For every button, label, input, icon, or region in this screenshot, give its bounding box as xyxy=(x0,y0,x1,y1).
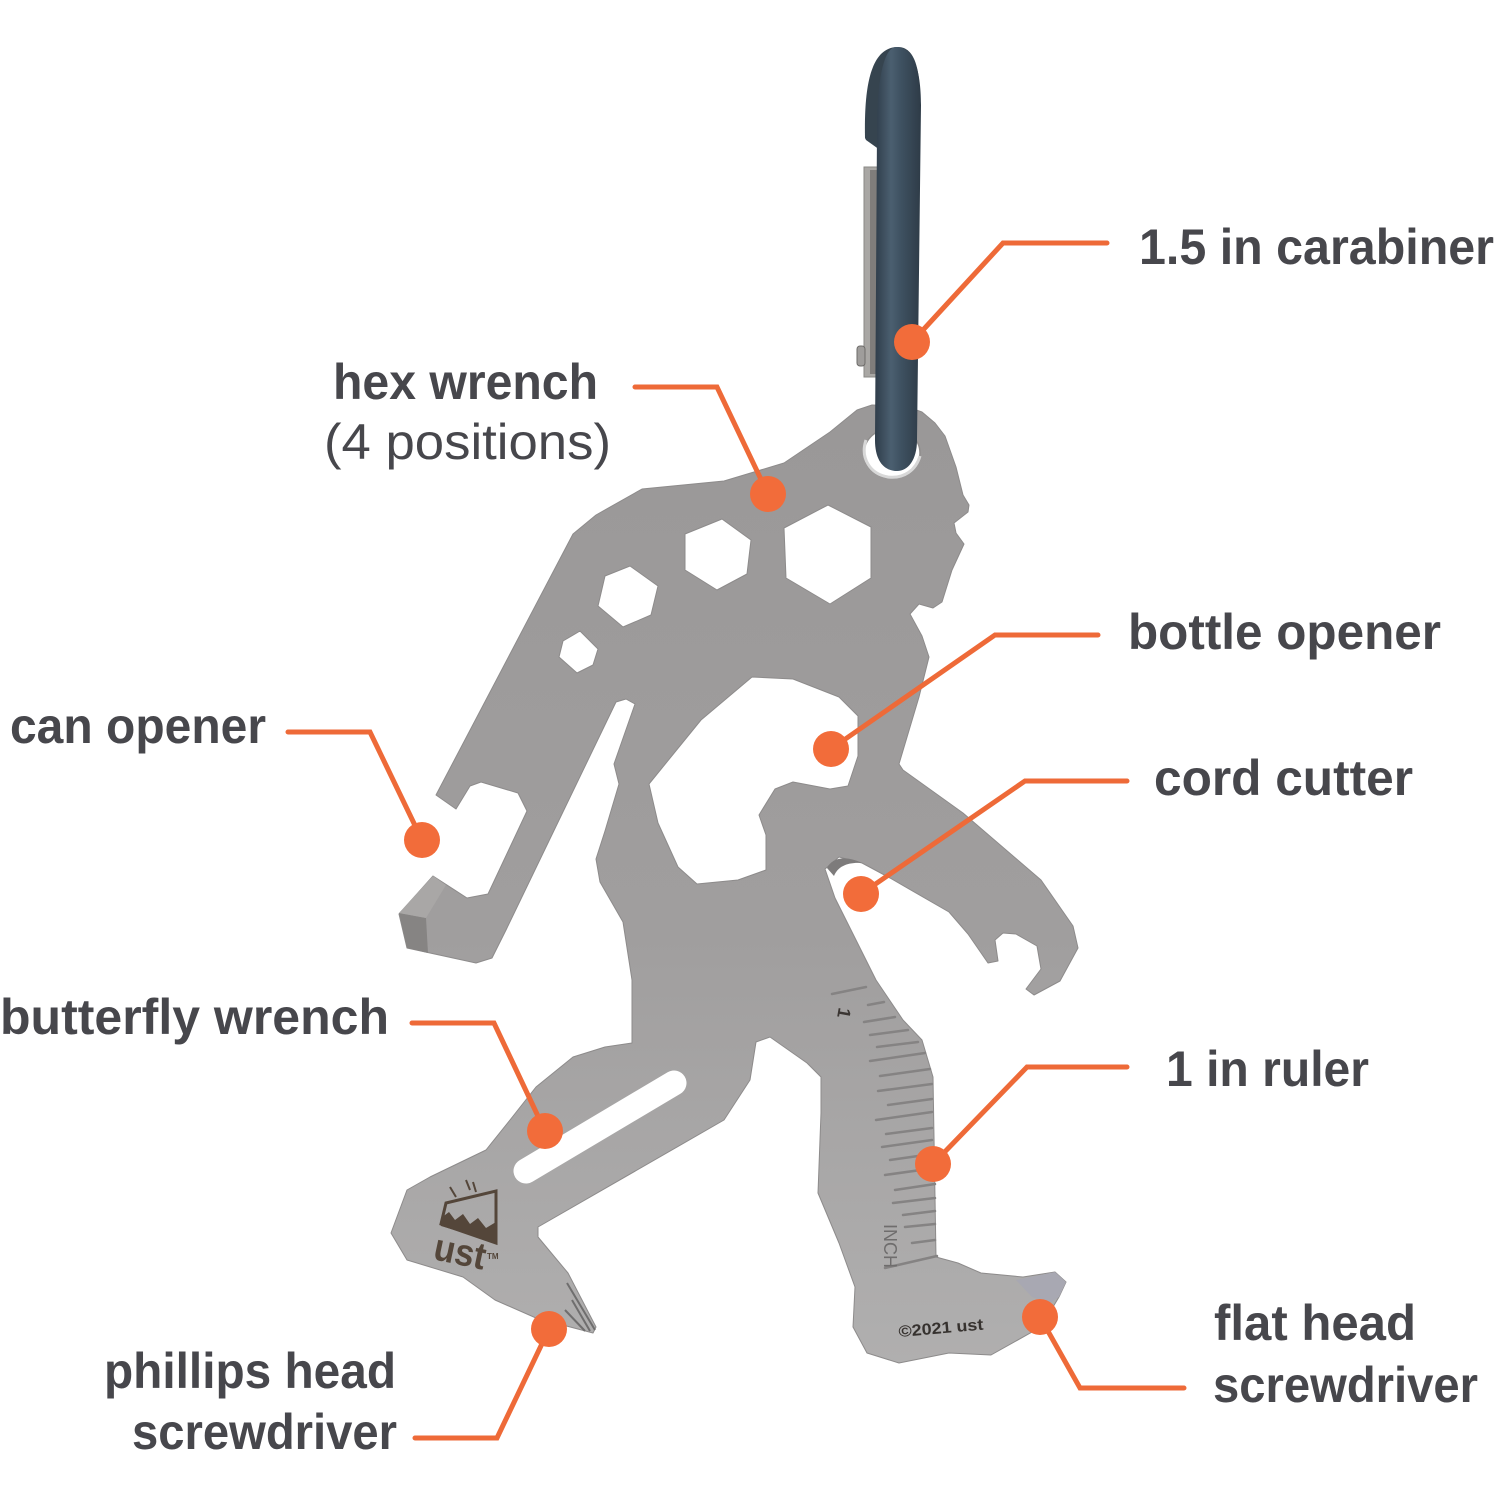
phillips tip xyxy=(565,1283,595,1331)
lanyard hole xyxy=(864,428,920,478)
ruler label INCH: INCH xyxy=(880,1224,900,1268)
callout: ruler: 1 in ruler xyxy=(1166,1041,1369,1097)
callout: phillips head screwdriver xyxy=(104,1311,567,1460)
ust logo engraving xyxy=(430,1180,499,1279)
callout: hex wrench: hex wrench xyxy=(333,354,598,410)
callout: cord cutter: cord cutter xyxy=(1154,750,1413,806)
callout: can opener: can opener xyxy=(10,698,266,754)
gate pin xyxy=(857,346,865,366)
ruler number 1: 1 xyxy=(833,1006,855,1020)
can opener side face xyxy=(399,913,428,953)
cord cutter inner bevel xyxy=(827,858,862,876)
callout: cord cutter xyxy=(843,750,1413,912)
callout: butterfly wrench xyxy=(0,989,563,1149)
can opener top facet xyxy=(399,876,446,918)
butterfly wrench slot xyxy=(526,1083,674,1171)
carabiner hook xyxy=(865,47,920,150)
callout: ruler xyxy=(915,1041,1369,1182)
callout: flat head screwdriver: screwdriver xyxy=(1213,1357,1478,1413)
callout: phillips head screwdriver: phillips head xyxy=(104,1343,396,1399)
callout: flat head screwdriver xyxy=(1022,1295,1478,1413)
callout: bottle opener: bottle opener xyxy=(1128,604,1441,660)
callout: carabiner: 1.5 in carabiner xyxy=(1139,219,1494,275)
copyright engraving: ©2021 ust xyxy=(898,1317,985,1341)
callout: butterfly wrench: butterfly wrench xyxy=(0,989,389,1045)
carabiner spine xyxy=(875,47,921,471)
callout: hex wrench: (4 positions) xyxy=(324,414,611,470)
callout: flat head screwdriver: flat head xyxy=(1214,1295,1416,1351)
carabiner xyxy=(857,47,921,471)
ust wordmark: ust xyxy=(430,1227,490,1279)
multi-tool body: bigfoot silhouette xyxy=(391,405,1078,1363)
callout: hex wrench xyxy=(324,354,786,512)
callout: phillips head screwdriver: screwdriver xyxy=(132,1404,397,1460)
callout: can opener xyxy=(10,698,440,858)
flat head tip xyxy=(1016,1272,1066,1303)
carabiner gate xyxy=(864,167,879,377)
ruler ticks xyxy=(832,987,937,1268)
callout: bottle opener xyxy=(813,604,1441,767)
callout: carabiner xyxy=(894,219,1494,360)
trademark: TM xyxy=(487,1252,499,1261)
